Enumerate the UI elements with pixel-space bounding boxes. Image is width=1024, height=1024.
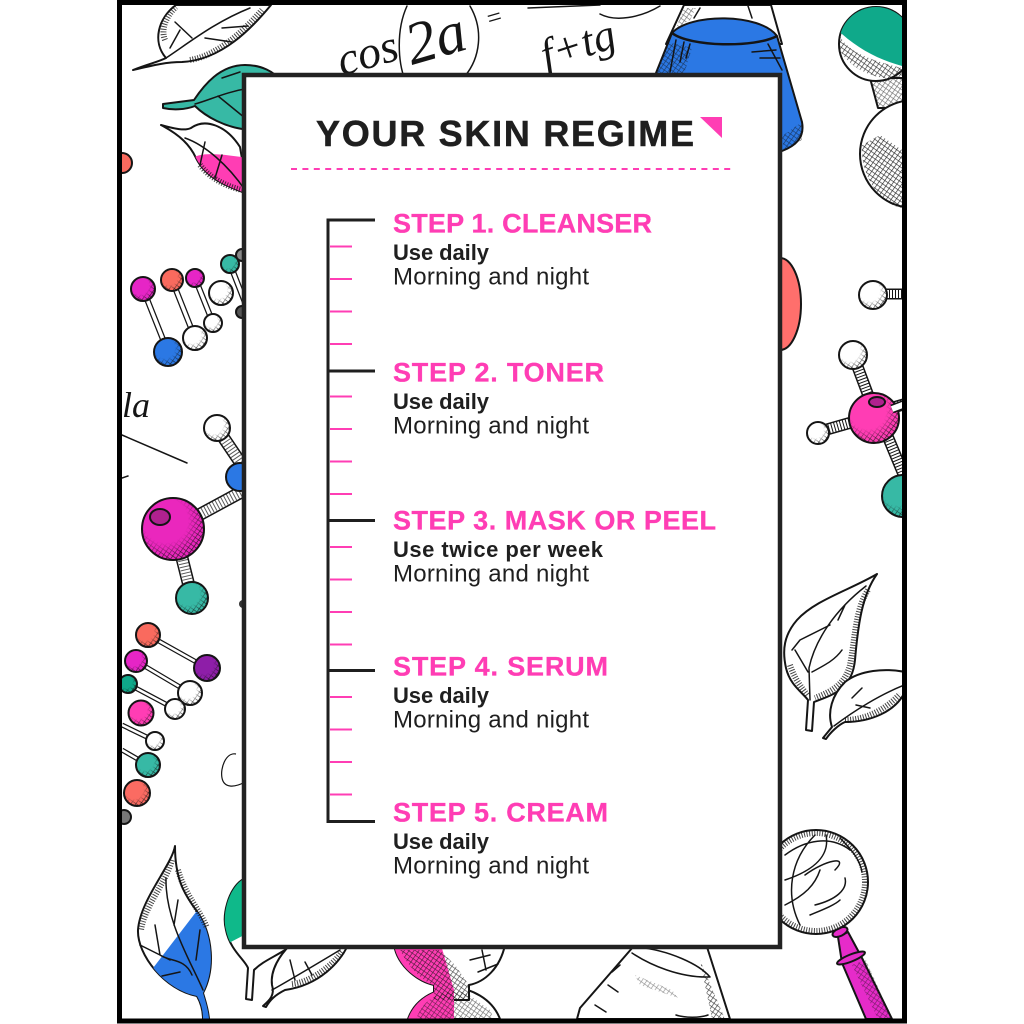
step 3 text: Morning and night [393, 560, 589, 588]
dashed pink divider [291, 168, 734, 170]
icon: green and white dumbbell flask [838, 6, 902, 208]
icon: teal leaf [163, 65, 280, 130]
title: YOUR SKIN REGIME [316, 113, 694, 154]
step 3 text: STEP 3. MASK OR PEEL [393, 506, 716, 536]
step 1 text [393, 208, 652, 290]
step 4 text: Morning and night [393, 706, 589, 734]
icon: pink and white dumbbell flask [394, 945, 505, 1019]
icon: DNA strand lower left [117, 623, 220, 824]
icon: green and white leaf behind card [224, 879, 285, 1001]
icon: magnifying glass [782, 829, 893, 1018]
step 1 text: Use daily [393, 240, 490, 265]
step 2 text: Morning and night [393, 412, 589, 440]
icon: pink and white leaf [161, 124, 248, 194]
icon: handwritten formula left [122, 385, 187, 478]
icon: blue flask top [650, 5, 803, 160]
step 1 text: Morning and night [393, 264, 589, 290]
frame: outer black border [120, 2, 904, 1021]
icon: DNA strand top left [131, 249, 248, 366]
step 4 text: STEP 4. SERUM [393, 652, 608, 682]
icon: bottom outline flask [577, 947, 730, 1019]
step 2 text [393, 358, 604, 440]
icon: red ball at left edge [122, 152, 133, 174]
icon: handwritten formula left: la [122, 385, 150, 425]
step 5 text: Morning and night [393, 852, 589, 880]
step 2 text: STEP 2. TONER [393, 358, 604, 388]
icon: blue and white leaf [138, 846, 211, 1019]
icon: small outline leaf bottom [263, 945, 348, 1007]
icon: handwritten formula cos(2a): cos [331, 20, 404, 86]
step 1 text: STEP 1. CLEANSER [393, 208, 652, 238]
icon: molecule with large magenta atom [142, 415, 254, 614]
icon: red ball behind card right [782, 257, 802, 351]
icon: pink corner triangle [700, 117, 722, 138]
icon: handwritten formula cos(2a): = [482, 1, 507, 34]
icon: handwritten C [222, 754, 245, 786]
step 4 text: Use daily [393, 683, 490, 708]
timeline ruler [328, 220, 375, 822]
step 4 text [393, 652, 608, 734]
step 5 text [393, 798, 608, 880]
panel: white regime card [244, 75, 780, 947]
icon: molecule with magenta atom right [806, 340, 902, 518]
step 5 text: Use daily [393, 829, 490, 854]
icon: small outline leaf right [823, 670, 905, 739]
step 2 text: Use daily [393, 389, 490, 414]
icon: handwritten formula top right: f+tg [534, 9, 622, 80]
step 3 text [393, 506, 716, 588]
icon: top-left outline leaf [133, 5, 271, 70]
icon: handwritten formula cos(2a) [340, 5, 501, 73]
step 5 text: STEP 5. CREAM [393, 798, 608, 828]
step 3 text: Use twice per week [393, 537, 604, 562]
icon: large outline leaf right [784, 574, 877, 731]
icon: small white molecule right [859, 281, 905, 309]
icon: handwritten formula top right [528, 5, 660, 80]
